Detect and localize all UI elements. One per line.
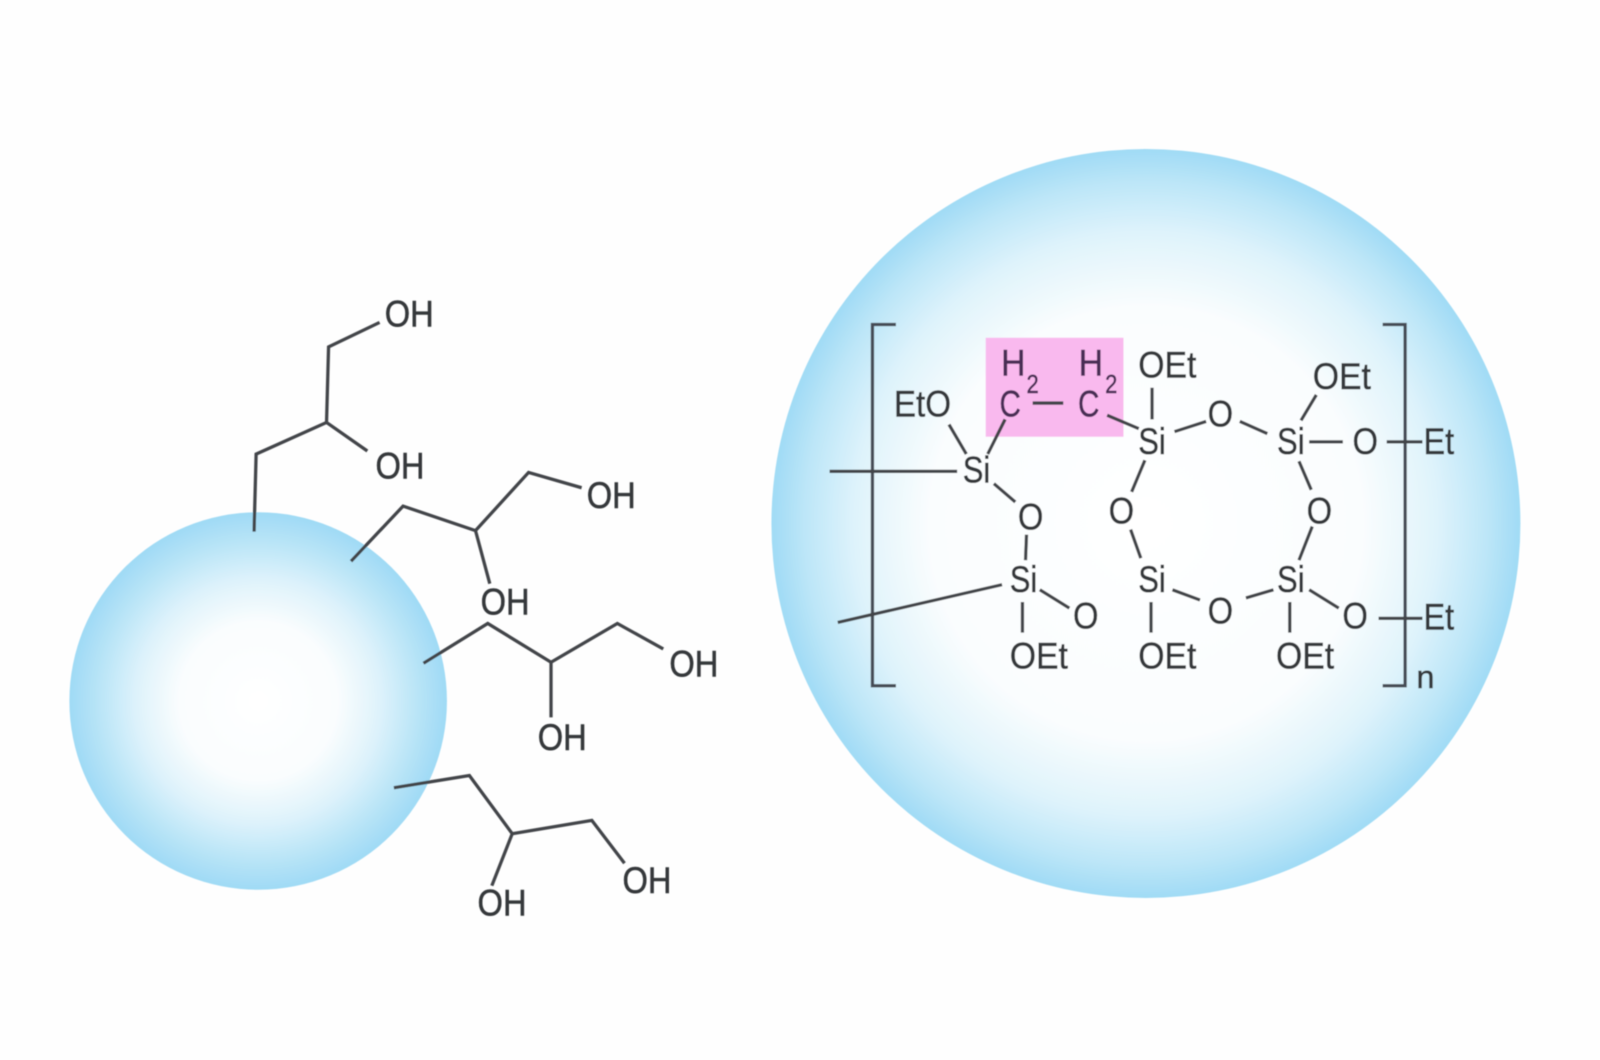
atom labels: oxygen: O: [1073, 596, 1098, 637]
chain 4 with OH groups: OH: [622, 860, 671, 901]
chain 2 with OH groups: OH: [481, 581, 530, 622]
ethylene bridge labels: 2: [1027, 371, 1039, 399]
atom labels: ethoxy groups: OEt: [1138, 635, 1196, 676]
atom labels: silicon: Si: [1138, 421, 1166, 462]
chain 1 with OH groups: OH: [385, 294, 434, 335]
atom labels: ethoxy groups: OEt: [1276, 635, 1334, 676]
chain 1 with OH groups: OH: [376, 446, 424, 487]
chain 3 with OH groups: OH: [538, 717, 587, 758]
repeat count n: n: [1416, 658, 1435, 695]
atom labels: oxygen: O: [1342, 596, 1368, 637]
panel: functionalised particle with hydroxyl chains: [69, 294, 718, 923]
atom labels: oxygen: [1018, 394, 1378, 637]
ethylene bridge labels: H: [1079, 343, 1103, 384]
atom labels: silicon: Si: [1138, 559, 1166, 600]
atom labels: ethoxy groups: EtO: [894, 383, 951, 424]
chain 2 with OH groups: OH: [587, 475, 636, 516]
atom labels: oxygen: O: [1353, 421, 1378, 462]
atom labels: oxygen: O: [1307, 490, 1332, 531]
atom labels: ethoxy groups: OEt: [1313, 356, 1371, 397]
atom labels: oxygen: O: [1208, 394, 1233, 435]
atom labels: oxygen: O: [1018, 497, 1043, 538]
atom labels: silicon: Si: [1277, 559, 1305, 600]
chain 3 with OH groups: [423, 623, 718, 758]
atom labels: ethoxy groups: Et: [1423, 421, 1454, 462]
atom labels: oxygen: O: [1109, 490, 1134, 531]
particle sphere: left: [69, 512, 447, 890]
ethylene bridge labels: C: [999, 383, 1021, 424]
ethylene bridge labels: 2: [1105, 371, 1117, 399]
chain 4 with OH groups: OH: [478, 882, 527, 923]
atom labels: ethoxy groups: OEt: [1010, 635, 1068, 676]
particle sphere: right: [771, 149, 1520, 898]
ethylene bridge labels: C: [1078, 383, 1099, 424]
ethylene bridge labels: H: [1001, 343, 1026, 384]
atom labels: silicon: Si: [1010, 559, 1037, 600]
repeat unit brackets: [872, 324, 1405, 686]
atom labels: ethoxy groups: OEt: [1138, 345, 1196, 386]
atom labels: silicon: [963, 421, 1305, 600]
atom labels: oxygen: O: [1208, 590, 1233, 631]
panel: silica sphere with polymer structure: [771, 149, 1520, 898]
chain 4 with OH groups: [394, 776, 671, 923]
chain 2 with OH groups: [351, 472, 636, 622]
atom labels: ethoxy groups: Et: [1423, 597, 1454, 638]
chain 1 with OH groups: [254, 294, 434, 532]
ethylene bridge labels: [999, 343, 1117, 424]
bonds: [830, 388, 1422, 633]
atom labels: silicon: Si: [963, 450, 990, 491]
chain 3 with OH groups: OH: [669, 644, 718, 685]
atom labels: ethoxy groups: [894, 345, 1454, 676]
highlight: ethylene bridge: [986, 338, 1123, 437]
atom labels: silicon: Si: [1277, 421, 1305, 462]
